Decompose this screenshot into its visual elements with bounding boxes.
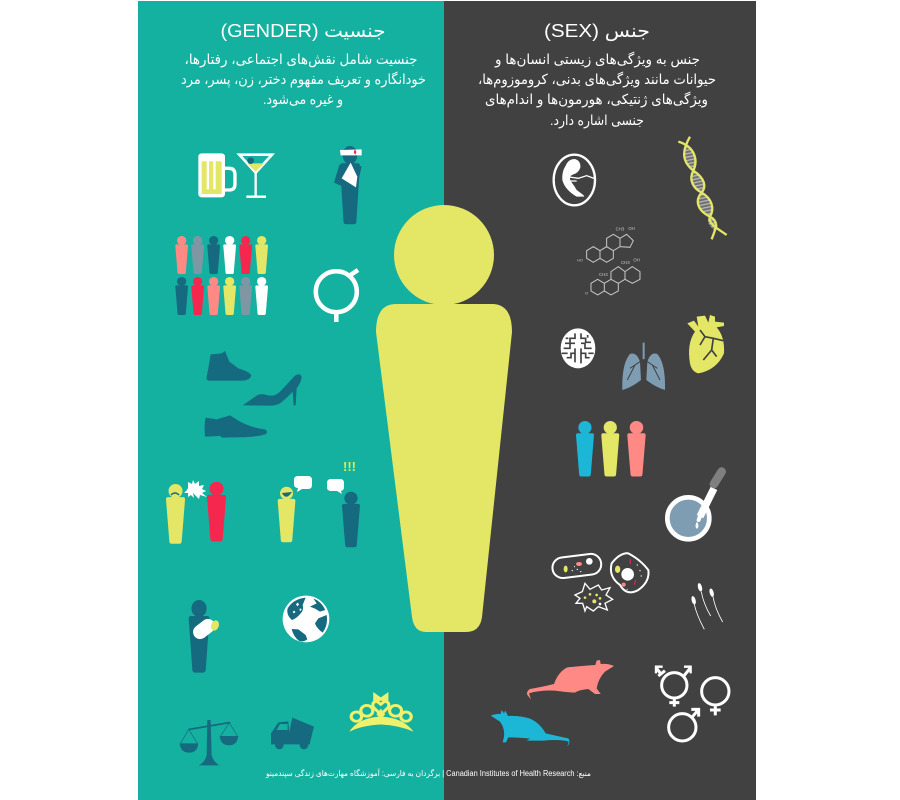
icon: petri dish and dropper	[667, 472, 722, 539]
icon: globe	[283, 596, 329, 642]
icon: hormone molecules	[577, 226, 640, 295]
central person figure	[376, 205, 512, 632]
icon: gender circle symbol	[316, 270, 358, 322]
people group: twelve figures	[175, 236, 268, 315]
icon: fetus in womb	[554, 155, 595, 205]
text block: sex definition: حیوانات مانند ویژگی‌های بدنی، کروموزوم‌ها،	[478, 71, 716, 88]
heading: sex: جنس (SEX)	[544, 21, 650, 41]
icon: heart	[687, 315, 724, 373]
icon: hormone molecules: CH3	[599, 272, 608, 277]
source credit: منبع: Canadian Institutes of Health Research | برگردان به فارسی: آموزشگاه مهارت‌های زندگی سپندمینو	[265, 768, 591, 778]
panel: sex	[444, 1, 756, 800]
icon: martini glass	[239, 155, 272, 197]
icon: hormone molecules: OH	[633, 258, 640, 263]
icon: gender symbols	[656, 667, 729, 741]
text block: gender definition: خودانگاره و تعریف مفهوم دختر، زن، پسر، مرد	[181, 71, 426, 88]
text block: sex definition: جنسی اشاره دارد.	[550, 112, 644, 129]
heading: gender: جنسیت (GENDER)	[220, 21, 386, 41]
icon: hormone molecules: CH3	[616, 227, 625, 232]
icon: brain	[561, 328, 595, 368]
icon: lungs	[622, 343, 665, 390]
text block: gender definition: و غیره می‌شود.	[263, 91, 343, 108]
text block: gender definition	[181, 51, 426, 108]
icon: sperm	[691, 583, 723, 629]
figures: three people	[576, 421, 646, 477]
icon: beer mug	[198, 153, 235, 197]
icon: dump truck	[271, 718, 314, 749]
text block: sex definition: جنس به ویژگی‌های زیستی انسان‌ها و	[494, 51, 700, 68]
figures: arguing pair	[166, 480, 226, 544]
figures: conversation pair	[278, 459, 360, 547]
icon: pink rat	[527, 660, 614, 699]
icon: high heel	[243, 374, 302, 406]
icon: hormone molecules: OH	[628, 226, 635, 231]
icon: hormone molecules: O	[585, 290, 588, 295]
text block: sex definition	[478, 51, 716, 129]
icon: cells	[551, 553, 649, 611]
text block: sex definition: ویژگی‌های ژنتیکی، هورمون‌ها و اندام‌های	[485, 91, 708, 108]
text block: gender definition: جنسیت شامل نقش‌های اجتماعی، رفتارها،	[184, 51, 418, 68]
icon: DNA helix	[678, 137, 727, 239]
icon: tiara	[349, 695, 414, 732]
figures: conversation pair: !!!	[343, 459, 356, 474]
icon: hormone molecules: CH3	[621, 260, 630, 265]
icon: high-top sneaker	[207, 351, 251, 381]
icon: hormone molecules: HO	[577, 259, 583, 263]
icon: blue mouse	[491, 710, 569, 747]
icon: balance scale	[180, 720, 238, 765]
icon: dress shoe	[205, 415, 267, 438]
figure: person holding baby	[189, 600, 220, 673]
panel: gender	[138, 1, 444, 800]
icon: injured person	[334, 146, 362, 224]
